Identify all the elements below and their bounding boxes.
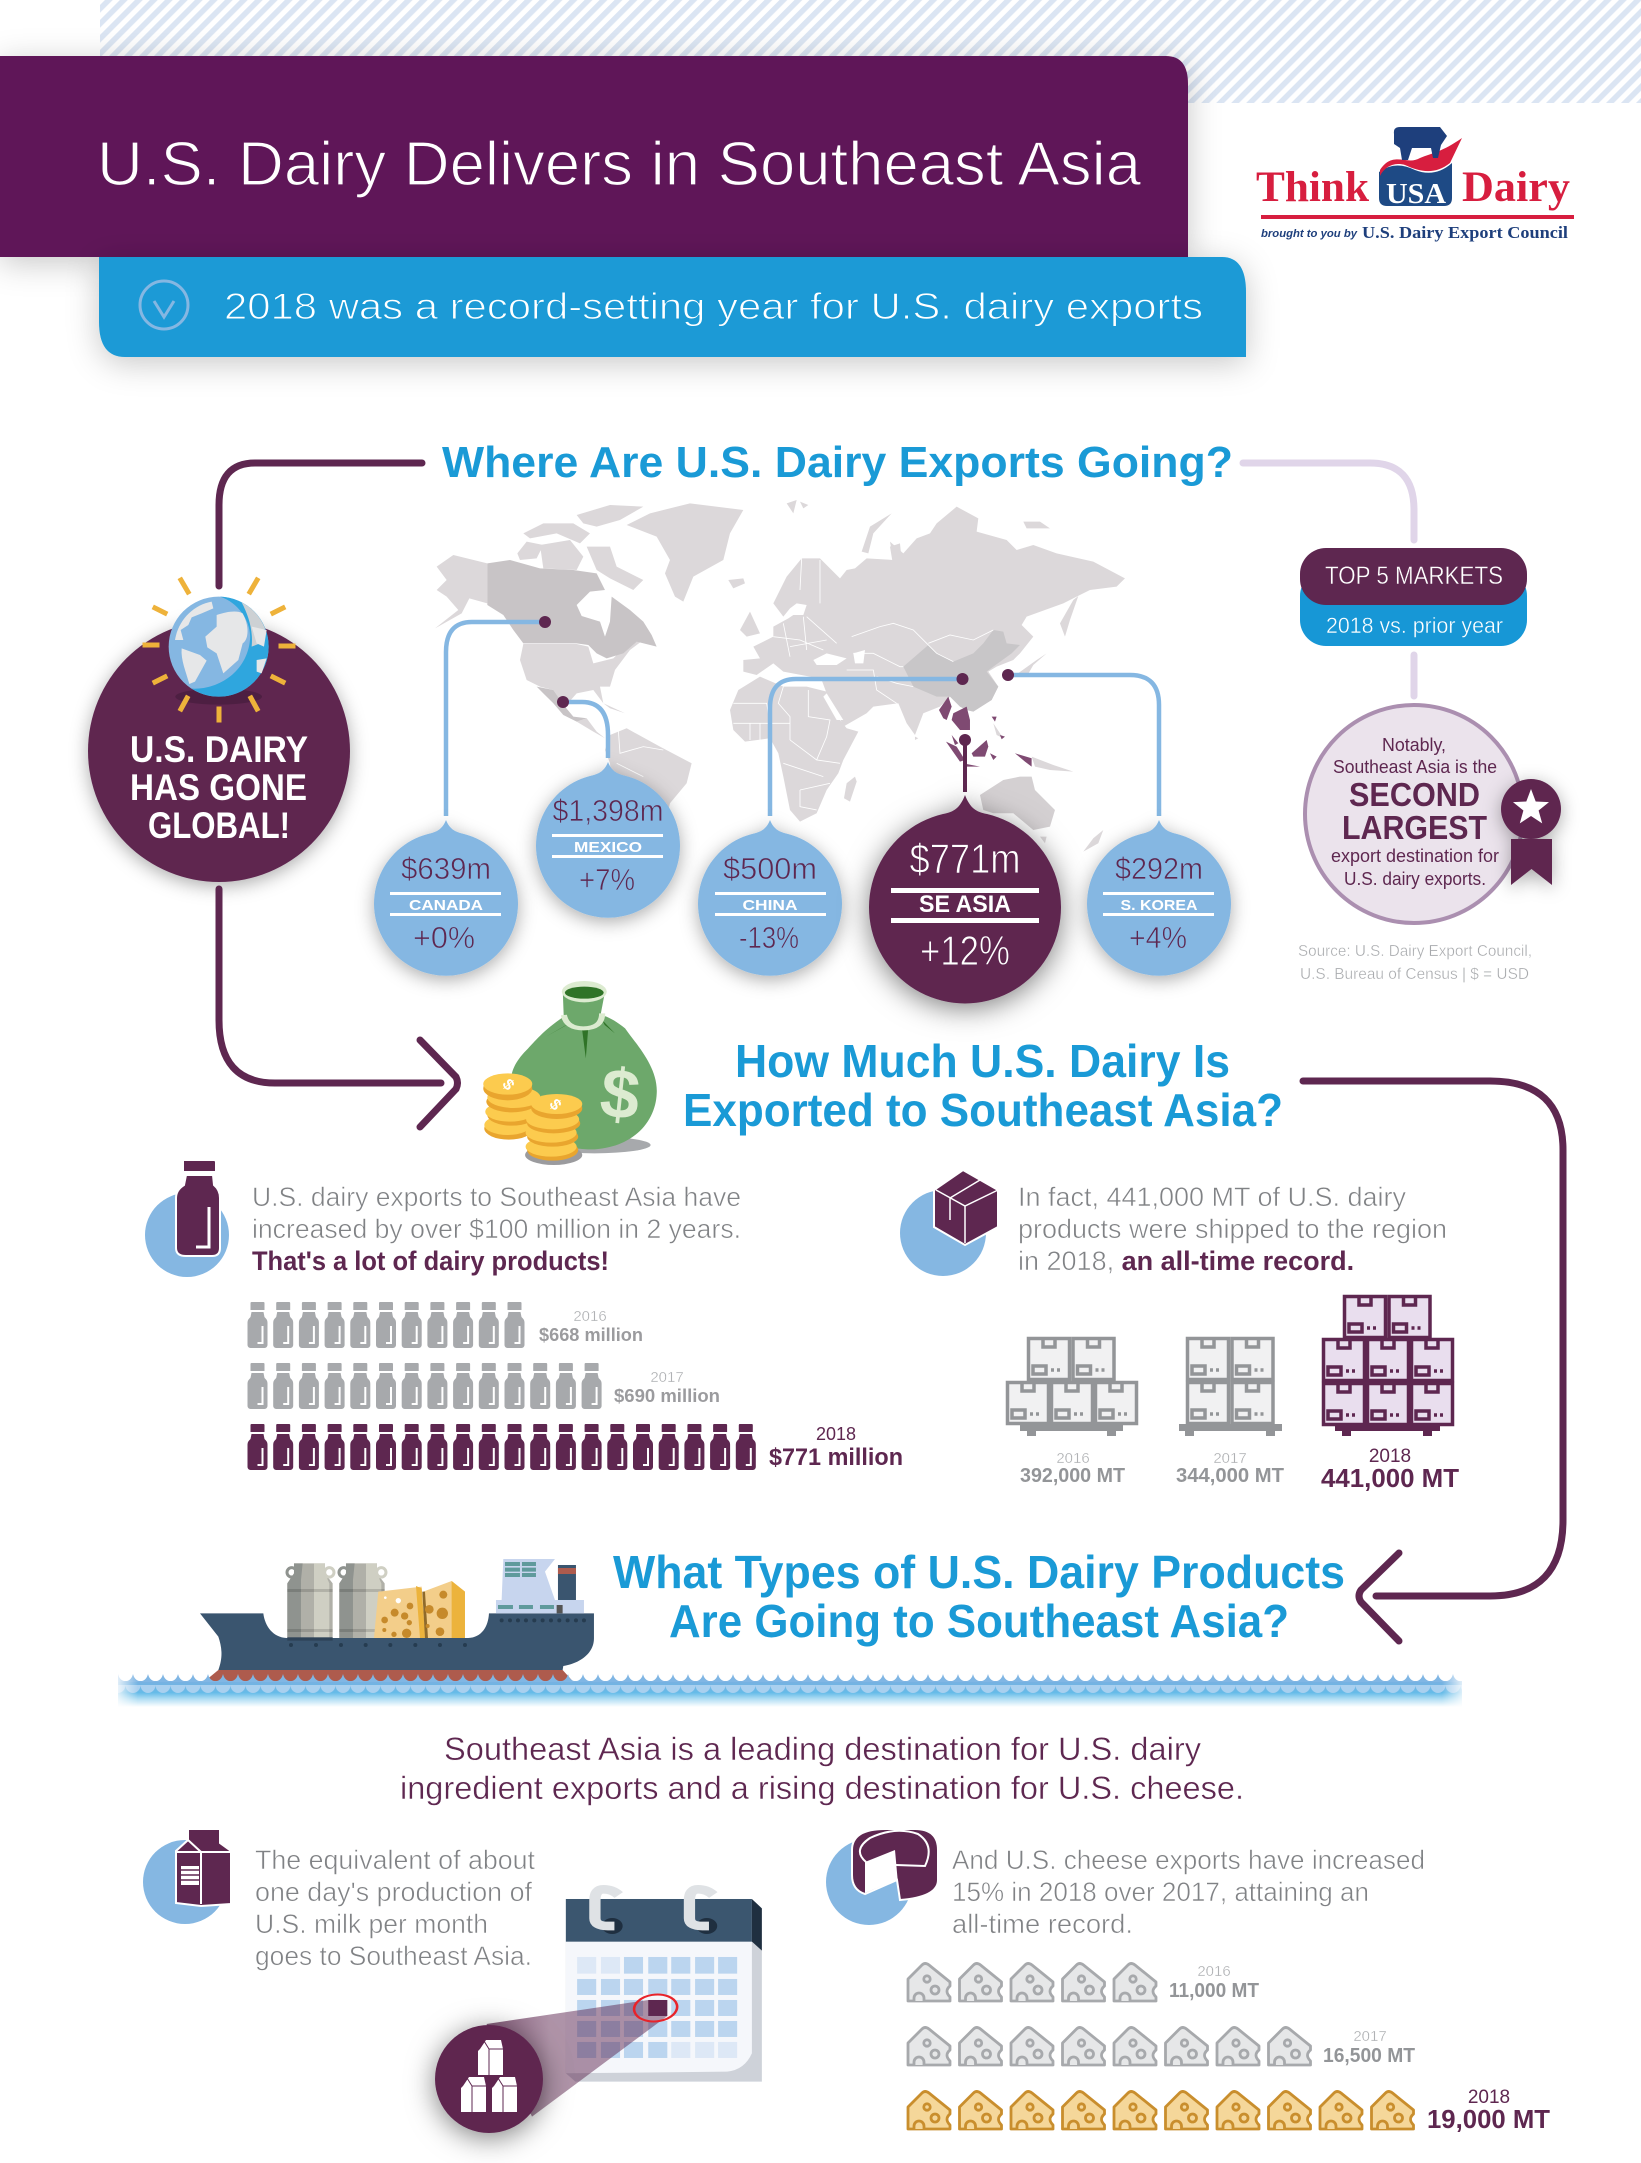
text: shipped volume: In fact, 441,000 MT of U.S. dairy xyxy=(1018,1182,1406,1212)
legend pill: top 5 markets xyxy=(1300,548,1527,646)
icon: globe xyxy=(169,597,269,705)
map: Europe, Asia, Africa and Oceania xyxy=(730,500,1125,852)
label: 2018 value: 2018 xyxy=(816,1424,856,1444)
market bubble: Mexico: MEXICO xyxy=(574,839,642,856)
market bubble: SE Asia xyxy=(869,795,1061,1003)
callout: second largest: export destination for xyxy=(1331,846,1499,866)
text: exports increased: That's a lot of dairy products! xyxy=(252,1246,609,1276)
label: 2018 metric tons xyxy=(1321,1446,1459,1493)
market bubble: China: CHINA xyxy=(742,897,798,914)
market bubble: Mexico: $1,398m xyxy=(552,793,664,828)
text: shipped volume xyxy=(1018,1182,1447,1276)
text: cheese exports: all-time record. xyxy=(952,1909,1133,1939)
market bubble: South Korea: +4% xyxy=(1129,920,1187,955)
callout: second largest xyxy=(1305,705,1561,923)
callout: second largest: Notably, xyxy=(1382,735,1446,755)
label: cheese 2018 xyxy=(1427,2087,1550,2134)
label: 2016 metric tons xyxy=(1020,1450,1125,1487)
market bubble: China: $500m xyxy=(723,851,817,886)
text: cheese exports: 15% in 2018 over 2017, attaining an xyxy=(952,1877,1369,1907)
market bubble: South Korea: S. KOREA xyxy=(1120,897,1198,914)
text: one day's production: The equivalent of about xyxy=(255,1845,535,1875)
icon: medal xyxy=(1501,779,1561,885)
label: cheese 2017 xyxy=(1323,2028,1415,2067)
pictogram: bottles 2018 xyxy=(248,1424,756,1470)
map: Americas and Greenland xyxy=(435,503,745,830)
illustration: calendar xyxy=(486,1889,762,2117)
icon: milk carton xyxy=(143,1829,231,1924)
label: 2016 metric tons: 392,000 MT xyxy=(1020,1465,1125,1487)
market bubble: SE Asia: SE ASIA xyxy=(919,891,1011,918)
connector: left arrow to money bag xyxy=(219,889,458,1127)
text: exports increased: U.S. dairy exports to Southeast Asia have xyxy=(252,1182,741,1212)
logo: Think USA Dairy: brought to you by xyxy=(1261,228,1358,240)
icon: cheese wheel xyxy=(826,1829,938,1925)
title banner: U.S. Dairy Delivers in Southeast Asia xyxy=(97,130,1142,199)
label: 2017 value: $690 million xyxy=(614,1386,720,1406)
market bubble: Canada xyxy=(374,820,518,976)
subtitle banner xyxy=(99,257,1246,357)
text: one day's production xyxy=(255,1845,535,1971)
label: cheese 2016: 2016 xyxy=(1197,1963,1231,1980)
label: cheese 2017: 16,500 MT xyxy=(1323,2045,1415,2067)
logo: Think USA Dairy: Dairy xyxy=(1462,164,1571,211)
label: 2016 value xyxy=(539,1308,643,1345)
callout: U.S. dairy has gone global xyxy=(88,580,350,882)
label: 2018 metric tons: 2018 xyxy=(1369,1446,1411,1467)
text: leading destination: Southeast Asia is a leading destination for U.S. dairy xyxy=(444,1731,1201,1767)
source note xyxy=(1298,943,1532,983)
label: 2017 metric tons: 344,000 MT xyxy=(1176,1465,1284,1487)
market bubble: SE Asia: +12% xyxy=(920,927,1010,974)
text: cheese exports xyxy=(952,1845,1425,1939)
subtitle banner: 2018 was a record-setting year for U.S. dairy exports xyxy=(224,286,1203,327)
callout: second largest: LARGEST xyxy=(1342,809,1487,846)
label: cheese 2018: 2018 xyxy=(1468,2087,1510,2108)
heading: what types of products: What Types of U.S. Dairy Products xyxy=(613,1546,1345,1598)
callout: second largest: Southeast Asia is the xyxy=(1333,757,1497,777)
label: 2016 value: $668 million xyxy=(539,1325,643,1345)
pictogram: cheese 2018 xyxy=(908,2092,1414,2129)
source note: Source: U.S. Dairy Export Council, xyxy=(1298,943,1532,960)
heading: how much exported xyxy=(683,1035,1283,1136)
callout: second largest: SECOND xyxy=(1349,776,1480,813)
label: cheese 2016 xyxy=(1169,1963,1259,2002)
market bubble: Canada: $639m xyxy=(401,851,491,886)
heading: what types of products xyxy=(613,1546,1345,1647)
source note: U.S. Bureau of Census | $ = USD xyxy=(1300,966,1529,983)
market bubble: SE Asia: $771m xyxy=(910,835,1020,882)
heading: what types of products: Are Going to Southeast Asia? xyxy=(669,1595,1289,1647)
market bubble: China xyxy=(698,820,842,976)
pictogram: pallet 2017 xyxy=(1179,1338,1282,1436)
pictogram: cheese 2016 xyxy=(908,1964,1156,2001)
pictogram: cheese 2017 xyxy=(908,2028,1310,2065)
world map xyxy=(435,500,1125,852)
logo: Think USA Dairy xyxy=(1256,127,1574,242)
market bubble: China: -13% xyxy=(739,920,799,955)
label: 2016 metric tons: 2016 xyxy=(1056,1450,1090,1467)
ship rivets xyxy=(289,1618,586,1647)
label: 2017 metric tons xyxy=(1176,1450,1284,1487)
text: exports increased: increased by over $100 million in 2 years. xyxy=(252,1214,741,1244)
background hatch xyxy=(100,0,1641,103)
text: one day's production: U.S. milk per month xyxy=(255,1909,488,1939)
label: cheese 2016: 11,000 MT xyxy=(1169,1980,1259,2002)
text: leading destination xyxy=(400,1731,1244,1806)
market bubble: Mexico xyxy=(536,762,680,918)
connector: top left purple line xyxy=(219,463,422,586)
callout: U.S. dairy has gone global: U.S. DAIRY xyxy=(130,729,308,770)
connector: top right light line xyxy=(1243,463,1414,696)
market bubble: South Korea xyxy=(1087,820,1231,976)
heading: how much exported: How Much U.S. Dairy Is xyxy=(735,1035,1230,1087)
icon: circle with milk cartons xyxy=(435,2025,543,2133)
logo: Think USA Dairy: Think xyxy=(1256,164,1369,211)
market bubble: South Korea: $292m xyxy=(1115,851,1203,886)
callout: U.S. dairy has gone global: GLOBAL! xyxy=(148,805,290,846)
icon: money bag and coins: $ xyxy=(545,1096,564,1114)
text: exports increased xyxy=(252,1182,741,1276)
callout: U.S. dairy has gone global: HAS GONE xyxy=(130,767,307,808)
heading: where are exports going: Where Are U.S. Dairy Exports Going? xyxy=(442,438,1233,487)
text: shipped volume: products were shipped to the region xyxy=(1018,1214,1447,1244)
label: 2018 value xyxy=(769,1424,903,1471)
text: cheese exports: And U.S. cheese exports have increased xyxy=(952,1845,1425,1875)
label: 2016 value: 2016 xyxy=(573,1308,607,1325)
text: shipped volume: in 2018, an all-time record. xyxy=(1018,1246,1354,1276)
milk cans xyxy=(287,1563,386,1641)
callout: second largest: U.S. dairy exports. xyxy=(1344,869,1486,889)
text: leading destination: ingredient exports and a rising destination for U.S. cheese. xyxy=(400,1770,1244,1806)
ship bridge xyxy=(496,1559,584,1613)
heading: how much exported: Exported to Southeast Asia? xyxy=(683,1084,1283,1136)
legend pill: top 5 markets: TOP 5 MARKETS xyxy=(1325,562,1503,590)
label: 2018 value: $771 million xyxy=(769,1444,903,1471)
pictogram: pallet 2018 xyxy=(1324,1296,1452,1436)
label: 2017 value: 2017 xyxy=(650,1369,684,1386)
market bubble: Canada: CANADA xyxy=(409,897,483,914)
text: one day's production: goes to Southeast Asia. xyxy=(255,1941,532,1971)
connector: right arrow to product types xyxy=(1303,1081,1563,1641)
label: 2017 metric tons: 2017 xyxy=(1213,1450,1247,1467)
legend pill: top 5 markets: 2018 vs. prior year xyxy=(1326,613,1503,638)
text: one day's production: one day's production of xyxy=(255,1877,532,1907)
icon: milk bottle xyxy=(145,1160,229,1277)
pictogram: bottles 2017 xyxy=(248,1363,602,1409)
logo: Think USA Dairy: U.S. Dairy Export Council xyxy=(1362,223,1568,242)
cheese blocks xyxy=(374,1581,465,1638)
icon: money bag and coins: $ xyxy=(498,1076,517,1094)
icon: shipping box xyxy=(900,1170,998,1276)
label: 2017 value xyxy=(614,1369,720,1406)
label: cheese 2017: 2017 xyxy=(1353,2028,1387,2045)
pictogram: pallet 2016 xyxy=(1008,1338,1136,1436)
market bubble: Mexico: +7% xyxy=(579,862,635,897)
label: cheese 2018: 19,000 MT xyxy=(1427,2104,1550,2134)
water band xyxy=(112,1674,1468,1708)
icon: sun rays xyxy=(145,580,293,720)
map connector lines xyxy=(446,622,1159,816)
illustration: cargo ship xyxy=(200,1559,594,1681)
icon: money bag and coins xyxy=(483,981,657,1165)
logo: Think USA Dairy: USA xyxy=(1386,179,1447,210)
pictogram: bottles 2016 xyxy=(248,1302,524,1348)
icon: money bag and coins: $ xyxy=(597,1053,644,1135)
market bubble: Canada: +0% xyxy=(413,920,475,955)
label: 2018 metric tons: 441,000 MT xyxy=(1321,1463,1459,1493)
title banner xyxy=(0,56,1188,257)
map location dots xyxy=(539,616,1014,792)
calendar grid xyxy=(577,1957,737,2058)
